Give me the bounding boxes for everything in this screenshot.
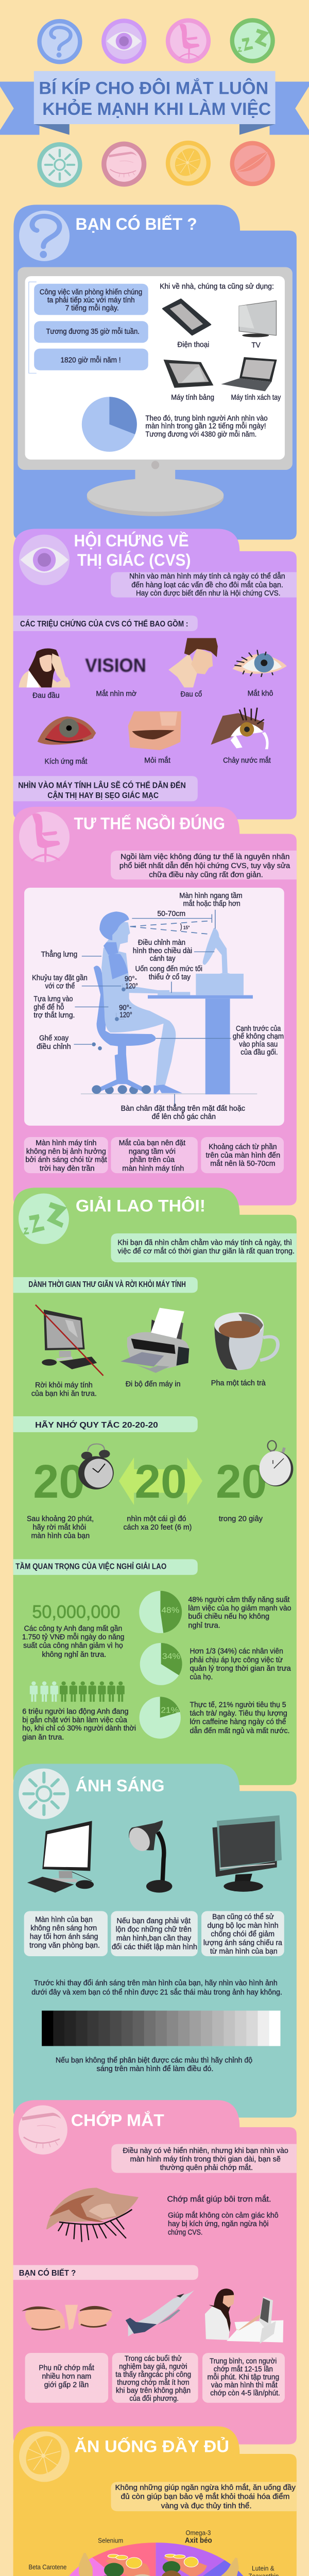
rule step: twenty seconds: [216, 1440, 293, 1523]
text: average daily screen time: [145, 414, 268, 438]
heading: did you know: BẠN CÓ BIẾT ?: [76, 215, 197, 234]
fact box: women blink more: [25, 2353, 108, 2403]
diagram labels: 50-70cm: [157, 910, 185, 918]
diagram labels: mắt hoặc thấp hơn: [183, 900, 241, 908]
text: 48% stat: làm việc của họ giảm mạnh vào: [188, 1604, 291, 1613]
device: laptop: [221, 357, 281, 402]
intro bubble: Nhìn vào màn hình máy tính cả ngày có thể dẫn: [129, 572, 285, 581]
picture: computer crossed out: Rời khỏi máy tính: [35, 1381, 93, 1389]
icon: contact lens badge: [230, 141, 275, 186]
picture: mug of tea: Pha một tách trà: [211, 1379, 266, 1387]
intro bubble: việc để cơ mắt có thời gian thư giãn là rất quan trọng.: [117, 1247, 295, 1256]
tip box: filter: [201, 1911, 284, 1956]
fact box: blink rate: chớp mắt 12-15 lần: [214, 2365, 273, 2374]
monitor stand: [87, 461, 224, 516]
food illustrations: [58, 2553, 255, 2576]
title banner: [0, 71, 309, 135]
device: phone: [163, 299, 211, 349]
text: six million workers: bị gắn chặt với bàn làm việc của: [22, 1716, 127, 1724]
icon: eye badge: [101, 19, 146, 64]
text: 21% stat: dẫn đến mất ngủ và mất nước.: [190, 1727, 289, 1735]
panel: did you know: [13, 205, 297, 539]
diagram labels: điều chỉnh: [37, 1042, 71, 1051]
icon: closed eyelid badge: [101, 142, 146, 187]
panel: take a break: [13, 1188, 297, 1785]
diagram labels: vào phía sau: [239, 1040, 278, 1048]
text: average daily screen time: màn hình trong gần 12 tiếng mỗi ngày!: [145, 422, 266, 430]
fact box: women blink more: nhiều hơn nam: [42, 2372, 91, 2381]
band: did you know: [13, 2265, 198, 2280]
stat bubble: hours per day: 7 tiếng mỗi ngày.: [65, 304, 119, 312]
pie chart: 48%: 48%: [161, 1606, 179, 1615]
chart labels: top: Axit béo: [185, 2536, 212, 2545]
intro bubble: Điều này có vẻ hiển nhiên, nhưng khi bạn nhìn vào: [123, 2147, 288, 2155]
heading: posture: TƯ THẾ NGỒI ĐÚNG: [74, 815, 225, 833]
text: six million workers: [22, 1707, 136, 1741]
chart labels: top: Selenium: [98, 2537, 123, 2544]
stat bubble: hours per day: [34, 284, 148, 315]
fact box: blink rate: Trung bình, con người: [210, 2357, 277, 2365]
rule step: twenty seconds: trong 20 giây: [219, 1515, 263, 1523]
chart labels: top: Omega-3: [185, 2529, 211, 2536]
fact box: pilots: khi bay trên không phận: [116, 2386, 191, 2395]
diagram labels: trợ thắt lưng.: [33, 1011, 75, 1020]
device: phone: Điện thoại: [177, 341, 209, 349]
picture: mug of tea: [211, 1312, 278, 1387]
tip box: distance: mắt nên là 50-70cm: [210, 1160, 276, 1168]
band: 20-20-20 rule: HÃY NHỚ QUY TẮC 20-20-20: [35, 1420, 158, 1430]
pictogram: workers taking lunch: [30, 1682, 125, 1702]
stat: 50,000,000: [22, 1602, 124, 1659]
pie chart: screen time share: [82, 397, 137, 452]
tip box: eye level: màn hình máy tính: [122, 1164, 184, 1173]
band: long term effects: [13, 776, 198, 801]
fact box: blink rate: vào màn hình thì mắt: [211, 2381, 278, 2389]
chart labels: top: [98, 2529, 212, 2545]
symptom: blurred vision: [85, 655, 146, 698]
device: tablet: Máy tính bảng: [171, 394, 214, 402]
text: average daily screen time: Tương đương với 4380 giờ mỗi năm.: [145, 430, 256, 438]
text: adjust brightness: [56, 2056, 252, 2073]
heading: CVS: [74, 531, 191, 570]
heading: lighting: ÁNH SÁNG: [76, 1776, 165, 1795]
text: blinking lubricates: Giúp mắt không còn cảm giác khô: [168, 2211, 279, 2219]
diagram labels: Ghế xoay: [39, 1034, 69, 1042]
pie chart: 48%: [139, 1591, 182, 1633]
intro bubble: thường quên phải chớp mắt.: [160, 2164, 253, 2172]
picture: desk lamp: [125, 1820, 172, 1893]
intro bubble: [111, 2482, 297, 2511]
symptom: neck pain: Đau cổ: [181, 690, 202, 699]
title banner: BÍ KÍP CHO ĐÔI MẮT LUÔN: [39, 78, 268, 98]
picture: closed eye with lashes: [46, 2188, 139, 2242]
diagram labels: [32, 892, 284, 1121]
text: six million workers: gian ăn trưa.: [22, 1733, 64, 1741]
symptom: irritated eye: Kích ứng mắt: [44, 757, 88, 766]
text: average daily screen time: Theo đó, trung bình người Anh nhìn vào: [145, 414, 268, 422]
diagram labels: 15°: [183, 925, 190, 930]
icon: zzz: [19, 1193, 69, 1244]
icon: question mark: [19, 211, 70, 261]
tip box: glare: không nên bị ảnh hưởng: [26, 1147, 106, 1156]
title banner: KHỎE MẠNH KHI LÀM VIỆC: [42, 99, 271, 119]
diagram labels: Bàn chân đặt thẳng trên mặt đất hoặc: [121, 1104, 245, 1113]
picture: bright monitor: [27, 1821, 94, 1893]
text: six million workers: họ, khi chỉ có 30% người dành thời: [22, 1724, 136, 1733]
text: 34% stat: phải chịu áp lực công việc từ: [190, 1656, 283, 1664]
symptom: watery eye: [211, 708, 271, 765]
diagram labels: thiểu ở cổ tay: [149, 973, 191, 981]
icon: closed eyelid: [19, 2105, 67, 2155]
band: symptoms heading: CÁC TRIỆU CHỨNG CỦA CVS CÓ THỂ BAO GỒM :: [20, 619, 188, 629]
tip box: filter: Bạn cũng có thể sử: [212, 1913, 274, 1921]
icon: lemon: [19, 2431, 70, 2482]
icon: eye: [19, 535, 70, 585]
tip box: change settings: đổi các thiết lập màn hình: [112, 1943, 197, 1951]
tip box: change settings: màn hình,bạn cần thay: [116, 1934, 192, 1942]
panel: blinking: [13, 2100, 297, 2444]
icon: question mark badge: [37, 19, 82, 64]
stat bubble: hours per day: ta phải tiếp xúc với máy tính: [47, 296, 135, 304]
text: 34% stat: [190, 1647, 291, 1681]
panel: balanced diet: [13, 2426, 297, 2576]
intro bubble: phổ biết nhất dẫn đến hội chứng CVS, tuy vậy sửa: [119, 862, 290, 870]
picture: printer: Đi bộ đến máy in: [126, 1380, 181, 1388]
picture: printer: [121, 1308, 189, 1388]
heading: CVS: THỊ GIÁC (CVS): [77, 551, 191, 570]
intro bubble: đến hàng loạt các vấn đề cho đôi mắt của bạn.: [131, 581, 283, 589]
text: 48% stat: [188, 1596, 291, 1630]
fact box: pilots: của đối phương.: [129, 2394, 179, 2403]
diagram labels: Điều chỉnh màn: [138, 939, 185, 947]
fact box: women blink more: Phụ nữ chớp mắt: [39, 2364, 95, 2372]
diagram labels: 90°-: [119, 1004, 131, 1012]
stat bubble: hours per day: Công việc văn phòng khiến chúng: [40, 288, 142, 297]
wheel slices: [56, 2543, 256, 2576]
panel: correct sitting posture: [13, 807, 297, 1206]
pie chart: 21%: 21%: [161, 1706, 179, 1715]
intro bubble: [111, 572, 297, 598]
diagram labels: hình theo chiều dài: [133, 947, 192, 955]
tip box: match brightness: hay tối hơn ánh sáng: [30, 1933, 98, 1941]
text: test instruction continued: dưới đây và xem bạn có thể nhìn được 21 sắc thái màu trong ảnh hay không.: [31, 1988, 282, 1997]
rule step: twenty feet with arrow: [119, 1455, 202, 1532]
heading: blinking: CHỚP MẮT: [71, 2111, 164, 2130]
symptom: irritated eye: [38, 716, 96, 766]
band: long term effects: CẬN THỊ HAY BỊ SẸO GIÁC MẠC: [47, 791, 159, 800]
rule step: twenty minutes: hãy rời mắt khỏi: [33, 1523, 86, 1532]
diagram labels: của đầu gối.: [241, 1048, 278, 1057]
picture: computer crossed out: [31, 1305, 104, 1398]
diagram labels: cánh tay: [150, 955, 176, 963]
fact box: pilots: nghiệm bay giả, người: [119, 2363, 187, 2371]
heading: diet: ĂN UỐNG ĐẦY ĐỦ: [74, 2437, 229, 2456]
chart labels: around wheel: Beta Carotene: [28, 2563, 66, 2571]
text: blinking lubricates: hay bị kích ứng, ngăn ngừa hội: [168, 2220, 269, 2228]
stat: 50,000,000: 1.750 tỷ VNĐ mỗi ngày do năng: [22, 1633, 124, 1641]
tip box: glare: [24, 1137, 108, 1173]
text: adjust brightness: sáng trên màn hình để làm điều đó.: [96, 2064, 213, 2073]
icon: lemon badge: [166, 141, 211, 186]
tip box: change settings: Nếu bạn đang phải vật: [117, 1917, 191, 1925]
fact box: pilots: ta thấy rằngcác phi công: [115, 2370, 191, 2379]
stat bubble: hours per year: [34, 349, 148, 370]
rule step: twenty feet with arrow: nhìn một cái gì đó: [127, 1515, 186, 1523]
intro bubble: đủ còn giúp bạn bảo vệ mắt khỏi thoái hóa điểm: [121, 2493, 289, 2501]
monitor frame: [18, 267, 293, 470]
tip box: match brightness: Màn hình của bạn: [35, 1916, 93, 1924]
text: test instruction: Trước khi thay đổi ánh sáng trên màn hình của bạn, hãy nhìn vào hình ảnh: [34, 1979, 278, 1987]
stat: 50,000,000: 50,000,000: [32, 1602, 120, 1622]
intro bubble: vàng và đục thủy tinh thể.: [161, 2502, 252, 2510]
band: long term effects: NHÌN VÀO MÁY TÍNH LÂU SẼ CÓ THỂ DẪN ĐẾN: [18, 780, 186, 790]
stat: 50,000,000: suất của công nhân giảm vì họ: [23, 1641, 123, 1650]
diagram labels: Khuỷu tay đặt gần: [32, 974, 88, 982]
tip box: distance: [201, 1137, 284, 1173]
symptom: watery eye: Chảy nước mắt: [223, 756, 271, 765]
symptom: dry eye: [233, 650, 287, 698]
intro bubble: Không những giúp ngăn ngừa khô mắt, ăn uống đầy: [115, 2484, 296, 2492]
chart labels: around wheel: [27, 2563, 279, 2576]
text: blinking lubricates: chứng CVS.: [168, 2228, 202, 2236]
diagram labels: 90°-: [125, 975, 137, 983]
band: relax away from computer: [13, 1277, 198, 1293]
stat: 50,000,000: không nghỉ ăn trưa.: [42, 1650, 106, 1659]
rule step: twenty minutes: 20: [33, 1455, 85, 1508]
tip box: change settings: lộn đọc những chữ trên: [116, 1925, 192, 1934]
diagram labels: 120°: [125, 982, 138, 990]
text: 21% stat: [190, 1701, 289, 1735]
diagram labels: 120°: [119, 1011, 132, 1019]
band: did you know: BẠN CÓ BIẾT ?: [19, 2268, 76, 2278]
chart labels: around wheel: Lutein &: [252, 2565, 274, 2572]
picture: monitor with anti-glare filter: [212, 1815, 282, 1892]
tip box: glare: Màn hình máy tính: [36, 1139, 96, 1147]
device: laptop: Máy tính xách tay: [231, 394, 281, 402]
tip box: filter: từ màn hình của bạn: [210, 1947, 278, 1956]
tip box: match brightness: [24, 1911, 108, 1956]
tip box: eye level: phần trên của: [130, 1156, 175, 1164]
fact box: blink rate: chớp còn 4-5 lần/phút.: [210, 2389, 280, 2397]
tip box: match brightness: trong văn phòng bạn.: [29, 1941, 100, 1950]
intro bubble: [111, 851, 297, 879]
device: tablet: [164, 360, 214, 402]
tip box: distance: trên của màn hình đến: [205, 1151, 280, 1160]
tip box: eye level: ngang tầm với: [129, 1147, 176, 1156]
band: relax away from computer: DÀNH THỜI GIAN THƯ GIÃN VÀ RỜI KHỎI MÁY TÍNH: [28, 1279, 186, 1289]
diagram labels: với cơ thể: [45, 982, 75, 990]
icon: zzz badge: [230, 18, 275, 63]
text: 34% stat: quản lý trong thời gian ăn trưa: [190, 1664, 291, 1673]
stat bubble: hours per week: [34, 321, 148, 343]
intro bubble: màn hình máy tính trong thời gian dài, bạn sẽ: [130, 2155, 281, 2163]
header: icons and title banner: [0, 18, 309, 188]
band: importance of breaks: [13, 1559, 198, 1575]
intro bubble: Ngồi làm việc không đúng tư thế là nguyên nhân: [121, 853, 289, 861]
grayscale test bar: [42, 2011, 281, 2046]
symptom: headache: [19, 649, 70, 700]
intro bubble: [111, 1233, 297, 1262]
tip box: eye level: [111, 1137, 198, 1173]
diagram: ergonomic desk posture: [24, 888, 284, 1126]
icon: sun badge: [37, 142, 82, 188]
rule step: twenty feet with arrow: 20: [134, 1455, 187, 1508]
rule step: twenty minutes: [27, 1444, 114, 1540]
tip box: change settings: [111, 1911, 198, 1956]
text: 21% stat: lớn caffeine hàng ngày có thể: [190, 1718, 286, 1726]
intro bubble: Hay còn được biết đến như là Hội chứng CVS.: [136, 589, 281, 598]
text: at home we also use: Khi về nhà, chúng ta cũng sử dụng:: [160, 282, 274, 291]
pie chart: 21%: [140, 1697, 181, 1739]
intro bubble: Khi bạn đã nhìn chằm chằm vào máy tính cả ngày, thì: [117, 1239, 292, 1247]
icon: sun: [19, 1769, 69, 1819]
symptom: blurred vision: VISION: [85, 655, 146, 676]
band: 20-20-20 rule: [13, 1416, 198, 1432]
picture: fighter jet: [126, 2291, 194, 2336]
diagram labels: Thẳng lưng: [41, 950, 77, 959]
text: 48% stat: 48% người cảm thấy năng suất: [188, 1596, 290, 1604]
tip box: glare: bởi ánh sáng chói từ mặt: [25, 1156, 108, 1164]
diagram labels: ghế không chạm: [233, 1032, 284, 1041]
intro bubble: [111, 2144, 297, 2173]
pie chart: 34%: [140, 1643, 182, 1685]
tip box: filter: chống chói để giảm: [211, 1930, 274, 1938]
fact box: blink rate: [202, 2353, 285, 2403]
text: 21% stat: Thực tế, 21% người tiêu thụ 5: [190, 1701, 286, 1709]
diagram labels: Cạnh trước của: [236, 1024, 281, 1033]
rule step: twenty minutes: Sau khoảng 20 phút,: [27, 1515, 94, 1523]
heading: CVS: HỘI CHỨNG VỀ: [74, 531, 189, 550]
text: adjust brightness: Nếu bạn không thể phân biệt được các màu thì hãy chỉnh độ: [56, 2056, 252, 2064]
tip box: filter: dụng bộ lọc màn hình: [208, 1922, 279, 1930]
tip box: match brightness: không nên sáng hơn: [30, 1924, 97, 1933]
rule step: twenty seconds: 20: [216, 1455, 267, 1508]
picture: closed eyes and brows: [22, 2305, 112, 2330]
stat: 50,000,000: Các công ty Anh đang mất gần: [24, 1624, 122, 1633]
diagram labels: để lên chỗ gác chân: [152, 1113, 216, 1121]
band: importance of breaks: TẦM QUAN TRỌNG CỦA VIỆC NGHỈ GIẢI LAO: [15, 1562, 166, 1571]
text: blinking lubricates: [167, 2194, 279, 2236]
tip box: eye level: Mắt của bạn nên đặt: [119, 1139, 186, 1147]
intro bubble: chữa điều này cũng rất đơn giản.: [149, 871, 263, 879]
heading: take a break: GIẢI LAO THÔI!: [76, 1196, 205, 1215]
chart: nutrient food wheel: [27, 2529, 279, 2576]
symptom: headache: Đau đầu: [32, 691, 60, 700]
tip box: distance: Khoảng cách từ phần: [209, 1143, 277, 1151]
icon: chair badge: [166, 18, 211, 63]
text: 48% stat: nghỉ trưa.: [188, 1621, 220, 1630]
symptom: blurred vision: Mắt nhìn mờ: [96, 690, 136, 698]
diagram labels: ghế để hỗ: [33, 1003, 64, 1011]
diagram labels: Màn hình ngang tầm: [179, 892, 243, 900]
text: 34% stat: của họ.: [190, 1673, 213, 1681]
text: 21% stat: tách trà/ ngày. Tiêu thụ lượng: [190, 1709, 287, 1718]
picture: computer crossed out: của bạn khi ăn trưa.: [31, 1389, 97, 1398]
text: 48% stat: buổi chiều nếu họ không: [188, 1613, 269, 1621]
symptom: dry eye: Mắt khô: [248, 689, 273, 698]
device: tv: TV: [251, 341, 261, 349]
fact box: pilots: [112, 2353, 198, 2403]
tip box: filter: lượng ánh sáng chiếu ra: [203, 1939, 283, 1947]
panel: computer vision syndrome: [13, 529, 297, 819]
panel: lighting: [13, 1764, 297, 2117]
text: six million workers: 6 triệu người lao động Anh đang: [22, 1707, 128, 1716]
symptom: neck pain: [168, 638, 218, 699]
stat bubble: hours per week: Tương đương 35 giờ mỗi tuần.: [46, 328, 140, 336]
diagram labels: Tựa lưng vào: [33, 995, 73, 1003]
text: 34% stat: Hơn 1/3 (34%) các nhân viên: [190, 1647, 283, 1655]
fact box: blink rate: mỗi phút. Khi tập trung: [208, 2373, 279, 2381]
text: blinking lubricates: Chớp mắt giúp bôi trơn mắt.: [167, 2194, 271, 2204]
device: tv: [239, 301, 276, 349]
band: symptoms heading: [13, 616, 198, 631]
rule step: twenty minutes: màn hình của bạn: [31, 1532, 90, 1540]
tip box: glare: trời hay đèn trần: [40, 1164, 95, 1173]
pie chart: 34%: 34%: [162, 1652, 180, 1661]
rule step: twenty feet with arrow: cách xa 20 feet (6 m): [124, 1523, 192, 1532]
stat bubble: hours per year: 1820 giờ mỗi năm !: [60, 356, 121, 364]
icon: chair: [19, 811, 70, 862]
fact box: pilots: thương chớp mắt ít hơn: [117, 2379, 190, 2387]
fact box: women blink more: giới gấp 2 lần: [44, 2381, 89, 2389]
symptom: tired eye: [128, 711, 181, 765]
picture: woman at computer: [205, 2289, 283, 2344]
diagram labels: Uốn cong đến mức tối: [135, 965, 202, 973]
fact box: pilots: Trong các buổi thử: [125, 2354, 182, 2363]
diagram labels: ): [180, 923, 182, 931]
symptom: tired eye: Mỏi mắt: [144, 756, 171, 765]
